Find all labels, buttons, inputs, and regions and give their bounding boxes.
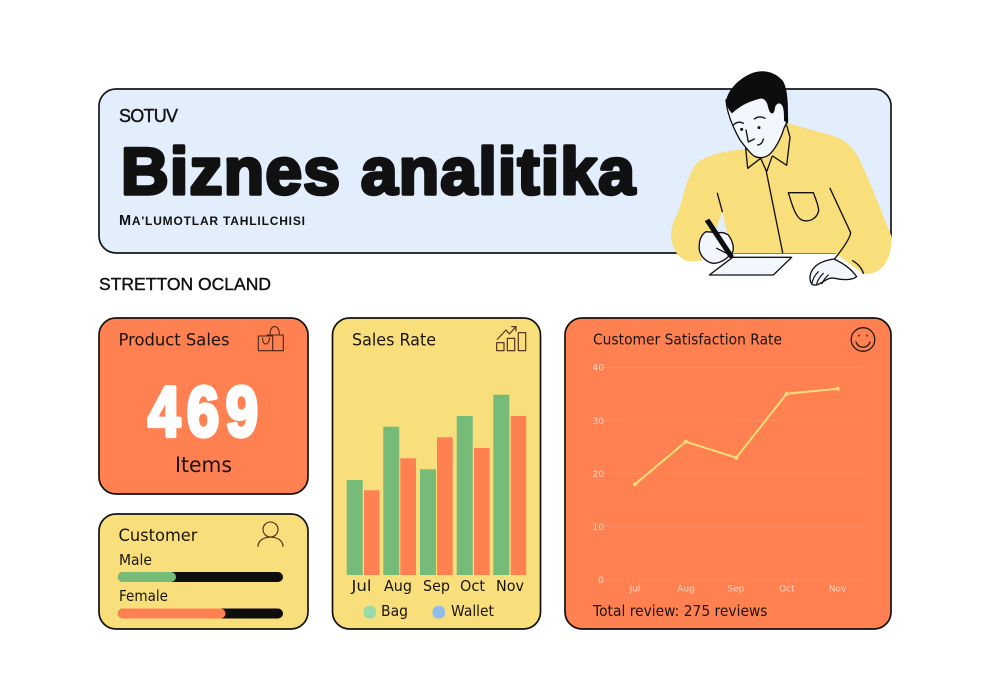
panel: customer xyxy=(99,514,308,629)
heading: customer: Customer xyxy=(118,526,198,546)
face xyxy=(726,90,788,158)
caption: total review: Total review: 275 reviews xyxy=(592,602,768,620)
pen xyxy=(705,219,734,262)
bar chart month labels: Nov xyxy=(496,577,524,595)
title: Biznes analitika xyxy=(121,134,636,208)
hair xyxy=(726,71,788,124)
line chart: 10 xyxy=(592,523,604,533)
icon: person xyxy=(258,522,283,546)
gap under arm xyxy=(715,212,727,234)
line chart: 40 xyxy=(592,364,604,374)
bar chart month labels: Sep xyxy=(423,577,450,595)
heading: customer satisfaction rate: Customer Satisfaction Rate xyxy=(593,330,782,348)
label: male: Male xyxy=(119,551,152,569)
line chart xyxy=(592,364,863,594)
legend: Wallet xyxy=(451,602,494,620)
line chart: 30 xyxy=(592,417,604,427)
paper xyxy=(709,257,792,275)
line chart: Oct xyxy=(779,584,795,594)
bar chart month labels: Jul xyxy=(350,577,372,595)
illustration: analyst writing at desk xyxy=(671,71,892,285)
caption: items: Items xyxy=(175,453,232,477)
panel: header banner xyxy=(99,89,891,253)
left hand xyxy=(699,232,733,263)
line chart: Nov xyxy=(829,584,847,594)
big number: 469 xyxy=(148,371,258,451)
progress bar: female xyxy=(118,608,283,618)
subtitle: MA'LUMOTLAR TAHLILCHISI xyxy=(119,213,305,229)
author name: STRETTON OCLAND xyxy=(99,274,271,294)
panel: customer satisfaction rate xyxy=(565,318,891,629)
shirt lines xyxy=(717,125,863,273)
bar chart xyxy=(347,395,526,575)
bar chart month labels xyxy=(350,577,524,595)
progress bar: male xyxy=(118,572,283,582)
bar chart month labels: Aug xyxy=(384,577,412,595)
facial features xyxy=(733,117,765,145)
line chart: 20 xyxy=(592,470,604,480)
icon: growth chart xyxy=(497,327,526,351)
legend: Bag xyxy=(381,602,408,620)
bar chart month labels: Oct xyxy=(460,577,485,595)
heading: product sales: Product Sales xyxy=(118,330,230,350)
label: female: Female xyxy=(119,587,168,605)
icon: smiley xyxy=(851,328,875,351)
line chart: 0 xyxy=(598,576,604,586)
icon: shopping bags xyxy=(258,326,283,351)
line chart: Aug xyxy=(677,584,695,594)
line chart: Jul xyxy=(629,584,640,594)
label: sotuv: SOTUV xyxy=(119,106,178,126)
line chart: Sep xyxy=(728,584,745,594)
panel: sales rate xyxy=(332,318,540,629)
heading: sales rate: Sales Rate xyxy=(352,330,436,350)
legend xyxy=(364,602,494,620)
panel: product sales xyxy=(99,318,308,494)
right hand xyxy=(810,259,857,285)
